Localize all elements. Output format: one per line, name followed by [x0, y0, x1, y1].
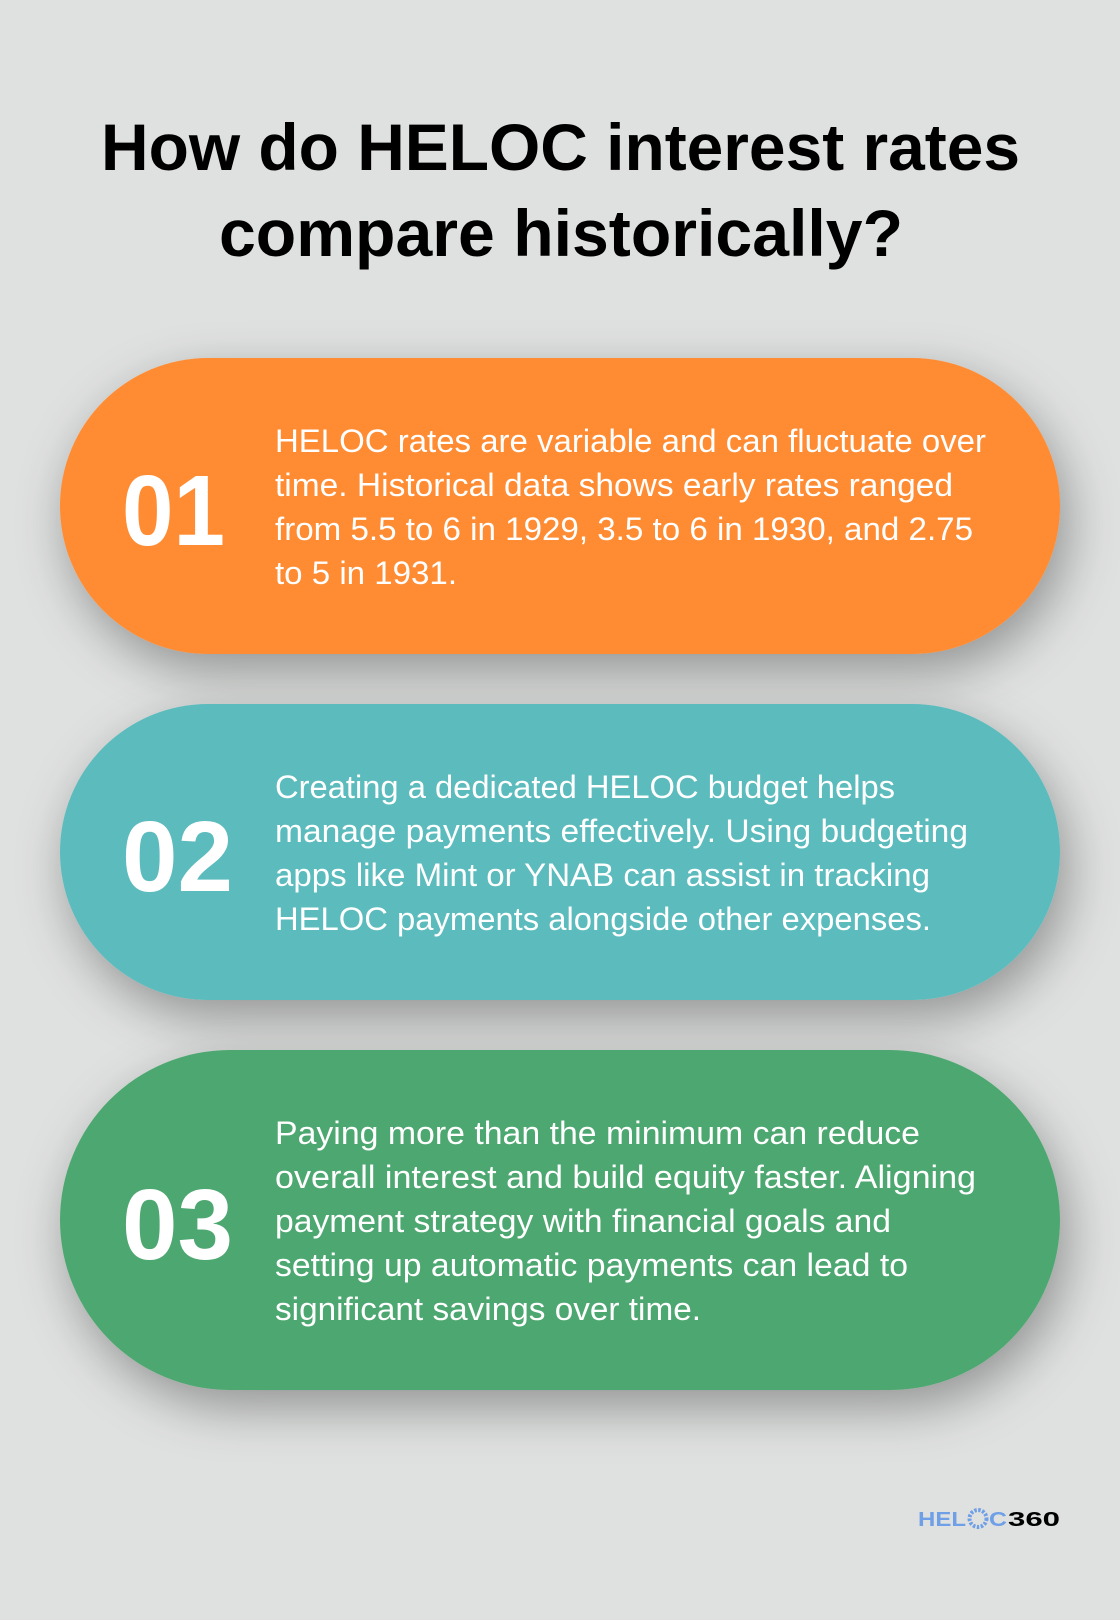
text block: step 02: HELOC payments alongside other expenses. — [275, 901, 931, 937]
title — [101, 110, 1020, 270]
panel: step 02 — [60, 704, 1060, 1000]
title: compare historically? — [219, 196, 903, 270]
title: How do HELOC interest rates — [101, 110, 1020, 184]
logo: HELOC360: 360 — [1008, 1509, 1060, 1531]
text block: step 02: Creating a dedicated HELOC budget helps — [275, 769, 895, 805]
text block: step 01: to 5 in 1931. — [275, 555, 457, 591]
text block: step 03: setting up automatic payments can lead to — [275, 1247, 908, 1283]
logo: HELOC360 — [918, 1509, 1060, 1531]
pill: orange — [60, 358, 1060, 654]
panel: step 01 — [60, 358, 1060, 654]
number 01: 01 — [122, 455, 225, 567]
text block: step 03: significant savings over time. — [275, 1291, 701, 1327]
text block: step 03: overall interest and build equity faster. Aligning — [275, 1159, 976, 1195]
text block: step 01 — [275, 423, 986, 591]
text block: step 03: Paying more than the minimum can reduce — [275, 1115, 920, 1151]
logo: HELOC360: C — [989, 1509, 1007, 1531]
text block: step 02: manage payments effectively. Using budgeting — [275, 813, 968, 849]
icon: swirl — [970, 1510, 986, 1527]
text block: step 01: from 5.5 to 6 in 1929, 3.5 to 6 in 1930, and 2.75 — [275, 511, 973, 547]
pill: teal — [60, 704, 1060, 1000]
text block: step 02 — [275, 769, 968, 937]
panel: step 03 — [60, 1050, 1060, 1390]
number 02: 02 — [122, 801, 233, 913]
logo: HELOC360: HEL — [918, 1509, 966, 1531]
text block: step 03 — [275, 1115, 976, 1327]
text block: step 03: payment strategy with financial goals and — [275, 1203, 891, 1239]
number 03: 03 — [122, 1169, 233, 1281]
text block: step 01: HELOC rates are variable and can fluctuate over — [275, 423, 986, 459]
text block: step 02: apps like Mint or YNAB can assist in tracking — [275, 857, 930, 893]
pill: green — [60, 1050, 1060, 1390]
text block: step 01: time. Historical data shows early rates ranged — [275, 467, 953, 503]
